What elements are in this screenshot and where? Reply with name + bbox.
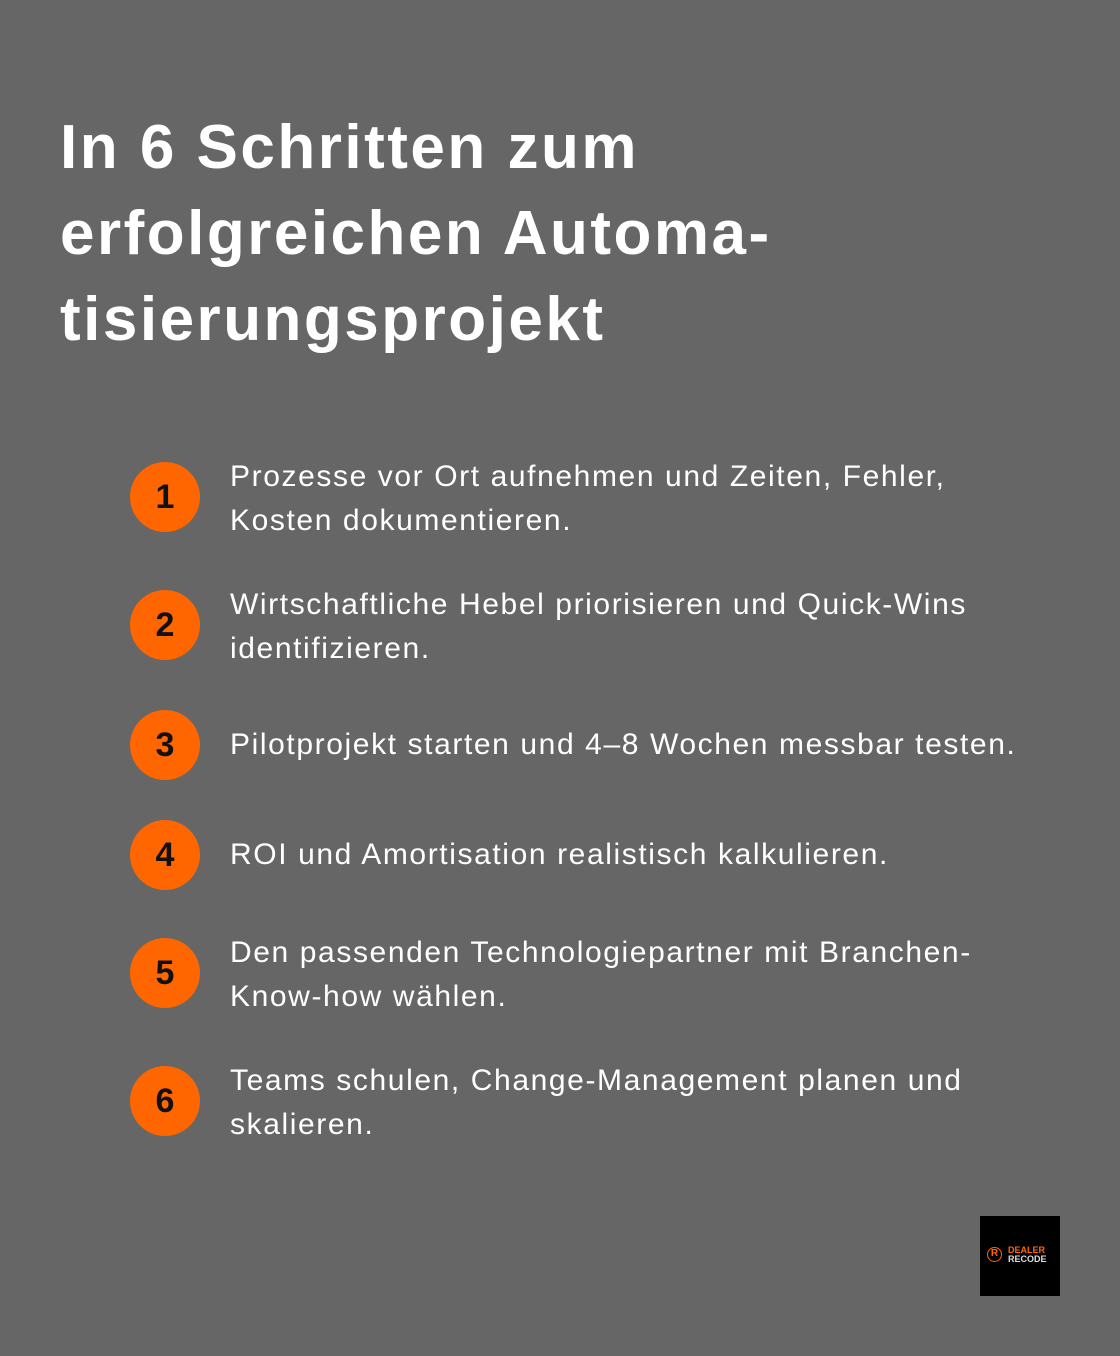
- step 6: [130, 1064, 963, 1141]
- title: erfolgreichen Automa-: [60, 199, 772, 268]
- step 1: Kosten dokumentieren.: [230, 504, 572, 537]
- step 5: [130, 936, 972, 1013]
- step 6: Teams schulen, Change-Management planen und: [230, 1064, 963, 1097]
- step 1: [130, 460, 946, 537]
- step 2: [130, 588, 967, 665]
- step 2: identifizieren.: [230, 632, 431, 665]
- step 5: Know-how wählen.: [230, 980, 507, 1013]
- logo: [980, 1216, 1060, 1296]
- step 6: 6: [156, 1082, 174, 1120]
- step 2: Wirtschaftliche Hebel priorisieren und Quick-Wins: [230, 588, 967, 621]
- step 5: 5: [156, 954, 174, 992]
- logo: R: [991, 1248, 998, 1259]
- step 5: Den passenden Technologiepartner mit Branchen-: [230, 936, 972, 969]
- step 6: skalieren.: [230, 1108, 374, 1141]
- step 2: 2: [156, 606, 174, 644]
- title: In 6 Schritten zum: [60, 113, 639, 182]
- title: tisierungsprojekt: [60, 285, 606, 354]
- step 3: [130, 710, 1016, 780]
- step 4: 4: [156, 836, 174, 874]
- logo: DEALER: [1008, 1245, 1045, 1255]
- step 4: [130, 820, 889, 890]
- title: [60, 113, 772, 354]
- logo: RECODE: [1008, 1254, 1047, 1264]
- step 1: 1: [156, 478, 174, 516]
- step 1: Prozesse vor Ort aufnehmen und Zeiten, Fehler,: [230, 460, 946, 493]
- step 4: ROI und Amortisation realistisch kalkulieren.: [230, 838, 889, 871]
- step 3: 3: [156, 726, 174, 764]
- step 3: Pilotprojekt starten und 4–8 Wochen messbar testen.: [230, 728, 1016, 761]
